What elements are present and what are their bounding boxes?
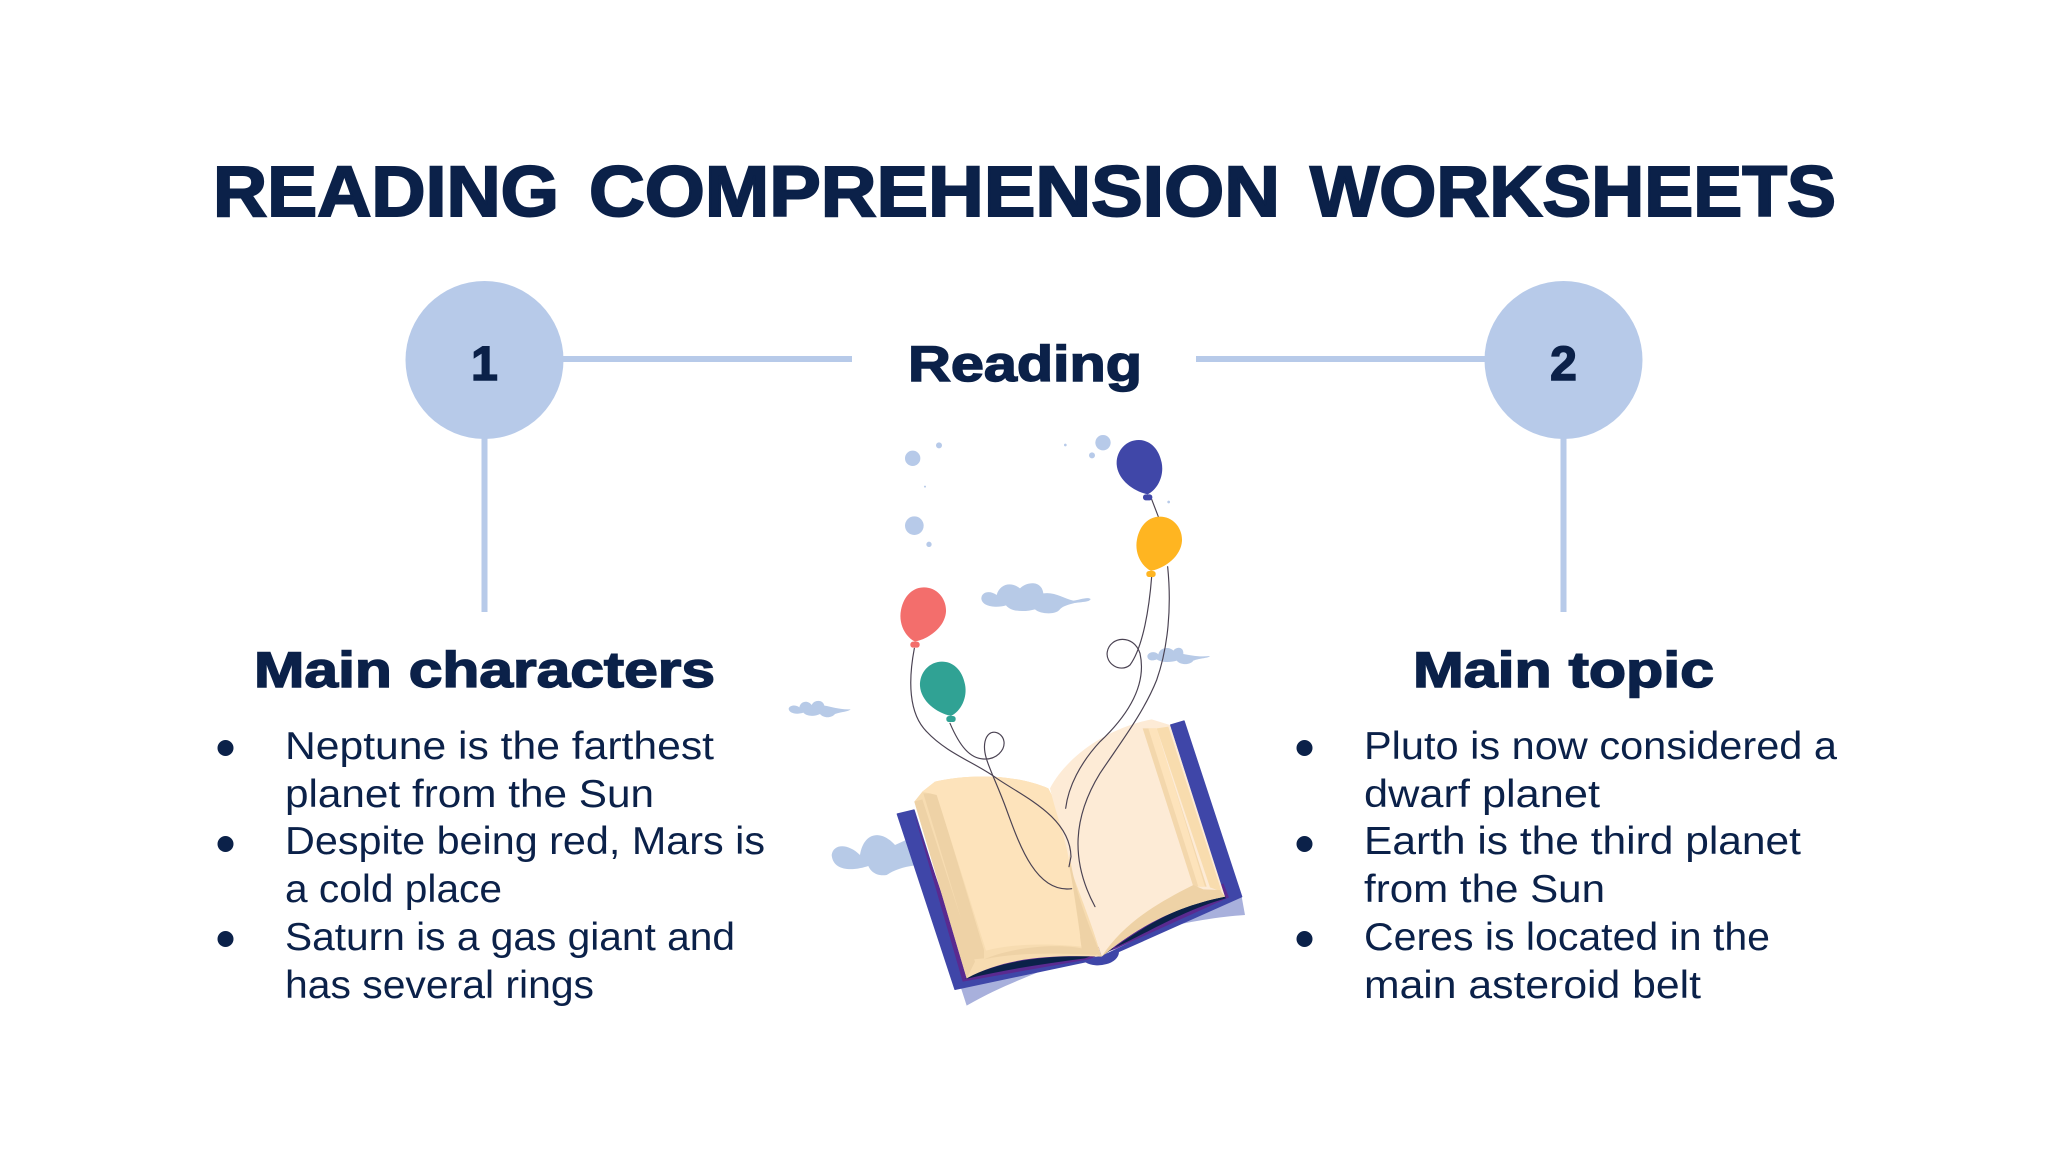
panel: main topic <box>1296 642 1837 1007</box>
title: COMPREHENSION <box>589 153 1280 232</box>
panel: main characters <box>218 642 765 1007</box>
cover inner edge <box>913 811 1229 982</box>
bullet list: main topic <box>1296 725 1837 1007</box>
bullet list: main topic: Pluto is now considered a <box>1364 725 1837 768</box>
heading: main topic: Main topic <box>1413 642 1714 698</box>
bullet list: main characters: a cold place <box>285 868 502 911</box>
bullet list: main characters: Neptune is the farthest <box>285 725 714 768</box>
connector lines <box>482 356 1566 612</box>
step 2 circle: 2 <box>1550 338 1577 391</box>
book cover <box>897 721 1242 989</box>
title: WORKSHEETS <box>1310 153 1836 232</box>
bullet list: main topic: dwarf planet <box>1364 773 1600 816</box>
bullet list: main characters: has several rings <box>285 964 594 1007</box>
balloon: yellow <box>1136 517 1182 577</box>
illustration: book with balloons <box>789 435 1245 1006</box>
bullet list: main topic: Ceres is located in the <box>1364 916 1770 959</box>
decorative dots <box>905 435 1170 547</box>
clouds <box>789 583 1210 875</box>
book <box>897 719 1245 1006</box>
right page block <box>1050 719 1225 957</box>
title: READING <box>213 153 559 232</box>
dark inner pages <box>965 896 1226 978</box>
step 1 circle: 1 <box>471 338 498 391</box>
left page edge strip <box>914 793 984 978</box>
bullet list: main characters <box>218 725 765 1007</box>
central gutter <box>1069 853 1102 957</box>
book shadow <box>960 895 1245 1006</box>
left page bottom band <box>984 937 1097 959</box>
step 2 circle <box>1484 281 1642 439</box>
bullet list: main topic: Earth is the third planet <box>1364 820 1801 863</box>
heading: main characters: Main characters <box>254 642 715 698</box>
right page bottom fold <box>1102 885 1225 957</box>
step 1 circle <box>406 281 564 439</box>
bullet list: main characters: Saturn is a gas giant and <box>285 916 735 959</box>
balloon: red <box>900 587 946 648</box>
center heading: Reading <box>908 336 1142 392</box>
bullet list: main characters: planet from the Sun <box>285 773 654 816</box>
bullet list: main characters: Despite being red, Mars is <box>285 820 765 863</box>
balloon: blue <box>1117 440 1162 500</box>
right page inner sheets <box>1143 728 1207 887</box>
left page block <box>914 776 1102 978</box>
bullet list: main topic: from the Sun <box>1364 868 1605 911</box>
balloon: green <box>920 662 966 722</box>
balloon strings <box>911 499 1169 907</box>
title <box>213 153 1836 232</box>
bullet list: main topic: main asteroid belt <box>1364 964 1701 1007</box>
left page top sheet <box>922 776 1082 951</box>
